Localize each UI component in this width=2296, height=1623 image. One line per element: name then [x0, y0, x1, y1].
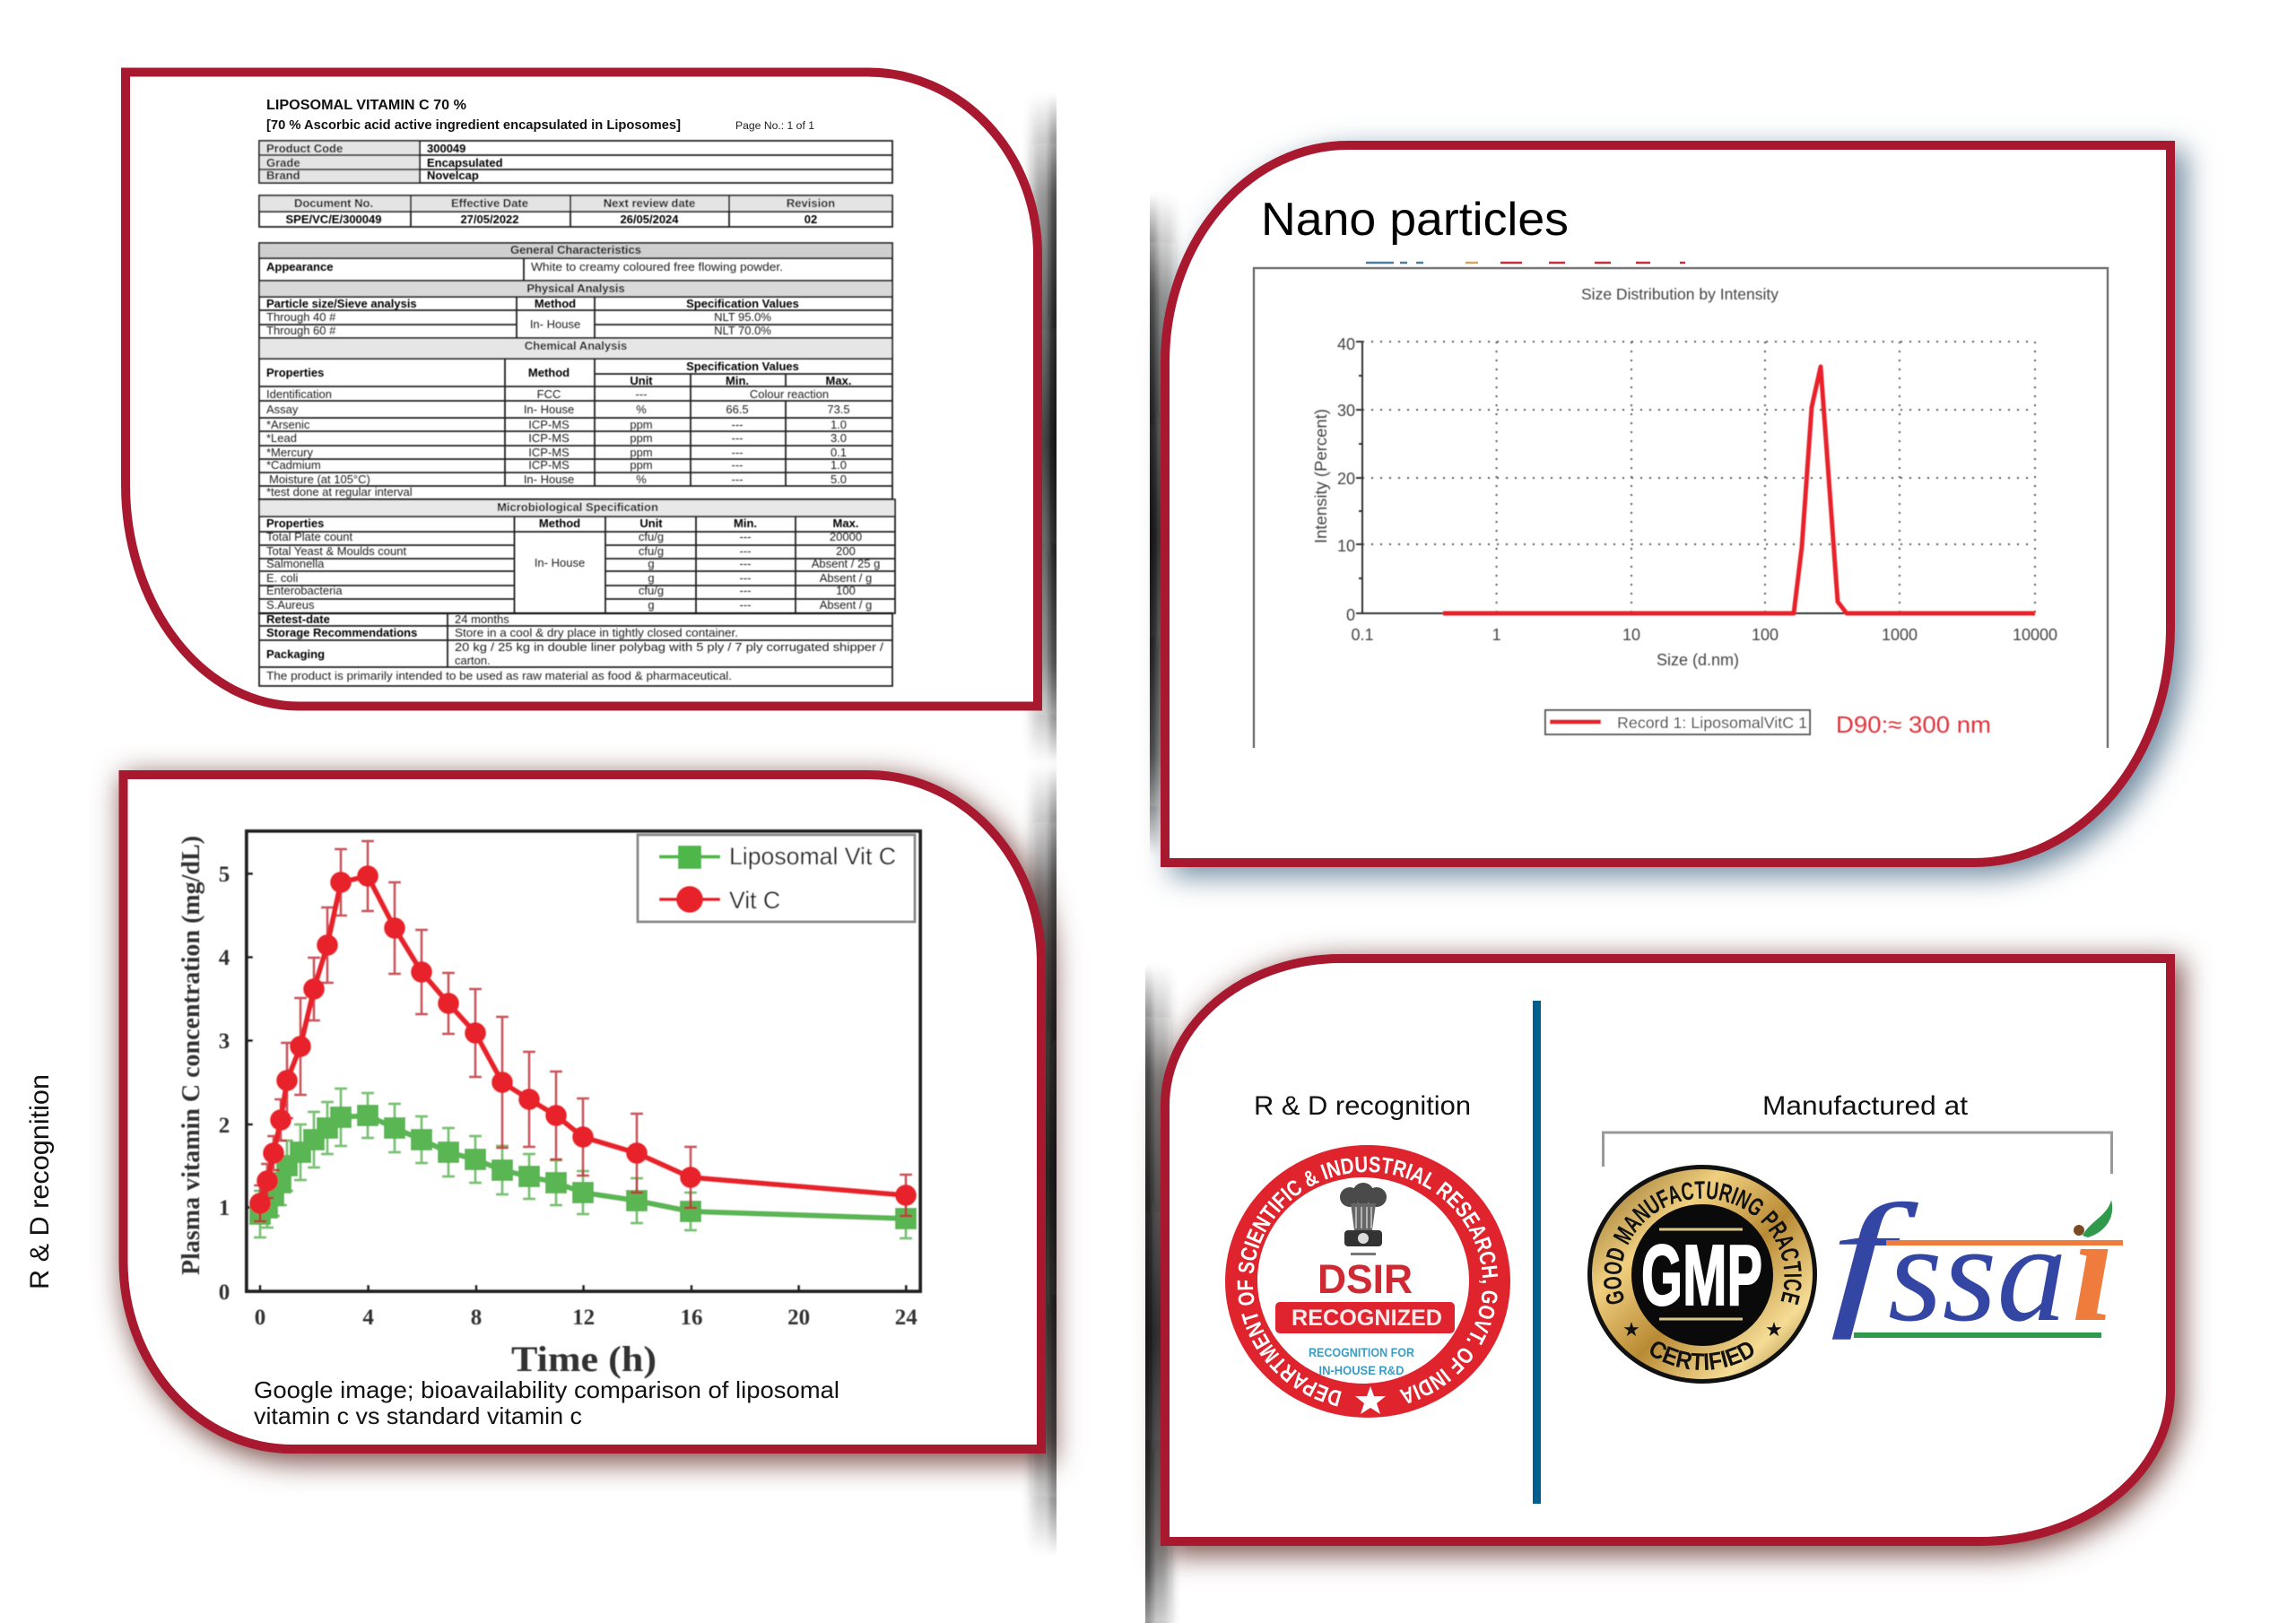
table: characteristics and chemical analysis: Through 60 # [266, 324, 336, 337]
table: product details: Brand [266, 169, 300, 182]
heading: manufactured at: Manufactured at [1762, 1091, 1969, 1121]
table: characteristics and chemical analysis: Min. [726, 374, 749, 387]
y axis tick labels: 4 [219, 946, 230, 970]
table: characteristics and chemical analysis: % [636, 473, 647, 486]
y axis tick labels: 30 [1337, 402, 1355, 420]
table: characteristics and chemical analysis: *Cadmium [266, 458, 321, 472]
x axis tick labels: 4 [362, 1306, 374, 1330]
series: liposomal vitamin C [250, 1089, 916, 1238]
table: characteristics and chemical analysis: Through 40 # [266, 310, 336, 324]
y axis tick labels: 20 [1337, 470, 1355, 488]
table: microbiological specification: cfu/g [639, 530, 664, 543]
table: characteristics and chemical analysis: Chemical Analysis [525, 339, 627, 352]
table: characteristics and chemical analysis: Method [528, 366, 570, 379]
table: microbiological specification: g [648, 571, 655, 585]
chart legend [638, 835, 915, 922]
table: storage and packaging: 20 kg / 25 kg in double liner polybag with 5 ply / 7 ply corrugated shipper / [455, 640, 883, 654]
table: characteristics and chemical analysis: Physical Analysis [526, 282, 625, 295]
table: microbiological specification: 20000 [830, 530, 862, 543]
x axis tick labels [1351, 626, 2057, 644]
table: microbiological specification: Absent / 25 g [812, 557, 880, 570]
table: characteristics and chemical analysis: --- [732, 458, 743, 472]
table: characteristics and chemical analysis: --- [732, 446, 743, 459]
chart caption [254, 1376, 839, 1429]
table: characteristics and chemical analysis: NLT 70.0% [714, 324, 771, 337]
table: characteristics and chemical analysis: Appearance [266, 260, 333, 273]
x axis tick labels: 1 [1492, 626, 1501, 644]
x axis tick labels: 100 [1752, 626, 1779, 644]
table: characteristics and chemical analysis: % [636, 403, 647, 416]
table: characteristics and chemical analysis: 1.0 [831, 458, 847, 472]
table: characteristics and chemical analysis: Particle size/Sieve analysis [266, 297, 417, 310]
y axis title: Intensity (Percent) [1312, 409, 1330, 543]
table: storage and packaging: carton. [455, 654, 491, 667]
table: storage and packaging: 24 months [455, 612, 509, 626]
table: product details [259, 141, 892, 183]
sheet subtitle: [70 % Ascorbic acid active ingredient encapsulated in Liposomes] [266, 118, 681, 133]
x axis tick labels: 20 [787, 1306, 810, 1330]
table: characteristics and chemical analysis: NLT 95.0% [714, 310, 771, 324]
panel: specification sheet [126, 72, 1038, 707]
table: characteristics and chemical analysis: ppm [630, 418, 653, 431]
table: microbiological specification: In- House [535, 556, 585, 569]
table: microbiological specification [259, 499, 895, 613]
icon: national emblem [1340, 1183, 1387, 1255]
table: characteristics and chemical analysis: General Characteristics [510, 243, 641, 256]
x axis tick labels [255, 1306, 918, 1330]
table: microbiological specification: Total Yeast & Moulds count [266, 544, 406, 558]
table: characteristics and chemical analysis [259, 243, 892, 499]
table: characteristics and chemical analysis: ICP-MS [528, 458, 570, 472]
table: characteristics and chemical analysis: ICP-MS [528, 418, 570, 431]
table: microbiological specification: Absent / g [820, 598, 872, 612]
panel: nano particles [1165, 145, 2170, 863]
table: characteristics and chemical analysis: Assay [266, 403, 299, 416]
side label: R & D recognition: R & D recognition [25, 1074, 55, 1289]
table: product details: Encapsulated [427, 156, 503, 169]
icon: fssai logo: ı [2072, 1184, 2115, 1354]
y axis tick labels: 1 [219, 1196, 230, 1220]
table: document control [259, 195, 892, 227]
table: characteristics and chemical analysis: FCC [537, 387, 561, 401]
table: characteristics and chemical analysis: --- [732, 431, 743, 445]
icon: fssai logo: f [1830, 1174, 1919, 1341]
page number: Page No.: 1 of 1 [735, 121, 814, 132]
table: characteristics and chemical analysis: Identification [266, 387, 332, 401]
table: microbiological specification: --- [739, 584, 752, 597]
sheet title: LIPOSOMAL VITAMIN C 70 % [266, 98, 466, 113]
table: characteristics and chemical analysis: Unit [630, 374, 653, 387]
y axis tick labels [1337, 335, 1355, 624]
y axis tick labels: 5 [219, 863, 230, 887]
table: storage and packaging [259, 612, 892, 686]
table: product details: 300049 [427, 142, 465, 155]
table: characteristics and chemical analysis: Specification Values [686, 360, 799, 373]
icon: fssai logo: ssa [1888, 1195, 2066, 1350]
x axis tick labels: 10000 [2013, 626, 2057, 644]
table: characteristics and chemical analysis: 66.5 [726, 403, 749, 416]
table: product details: Grade [266, 156, 300, 169]
table: characteristics and chemical analysis: ppm [630, 446, 653, 459]
table: characteristics and chemical analysis: Specification Values [686, 297, 799, 310]
table: microbiological specification: Total Plate count [266, 530, 353, 543]
table: document control: 27/05/2022 [460, 213, 519, 226]
table: microbiological specification: E. coli [266, 571, 299, 585]
x axis tick labels: 0 [255, 1306, 265, 1330]
table: characteristics and chemical analysis: White to creamy coloured free flowing powder. [531, 260, 783, 273]
table: storage and packaging: Storage Recommendations [266, 626, 417, 639]
icon: GMP certified seal: ★ [1765, 1318, 1783, 1341]
table: microbiological specification: S.Aureus [266, 598, 315, 612]
table: characteristics and chemical analysis: *Lead [266, 431, 297, 445]
icon: GMP certified seal [1587, 1165, 1817, 1384]
table: characteristics and chemical analysis: Max. [826, 374, 851, 387]
y axis tick labels: 0 [219, 1280, 230, 1305]
panel heading: Nano particles [1261, 194, 1569, 246]
table: characteristics and chemical analysis: Moisture (at 105°C) [269, 473, 370, 486]
table: storage and packaging: Retest-date [266, 612, 330, 626]
table: characteristics and chemical analysis: ppm [630, 431, 653, 445]
table: microbiological specification: --- [739, 557, 752, 570]
table: document control: Revision [787, 196, 835, 210]
table: microbiological specification: g [648, 598, 655, 612]
table: storage and packaging: Packaging [266, 647, 325, 661]
chart: size distribution by intensity: Size Distribution by Intensity [1581, 285, 1779, 303]
chart legend: Vit C [729, 887, 780, 914]
icon: DSIR recognized seal: DEPARTMENT OF SCIENTIFIC & INDUSTRIAL RESEARCH, GOVT. OF INDIA [1238, 1157, 1498, 1406]
y axis tick labels [219, 863, 230, 1305]
table: characteristics and chemical analysis: --- [732, 473, 743, 486]
icon: GMP certified seal: ★ [1622, 1318, 1640, 1341]
chart caption: Google image; bioavailability comparison of liposomal [254, 1376, 839, 1403]
table: characteristics and chemical analysis: Properties [266, 366, 324, 379]
table: microbiological specification: g [648, 557, 655, 570]
icon: DSIR recognized seal: RECOGNIZED [1292, 1306, 1442, 1331]
table: microbiological specification: Enterobacteria [266, 584, 343, 597]
table: characteristics and chemical analysis: Method [535, 297, 576, 310]
table: characteristics and chemical analysis: Colour reaction [750, 387, 829, 401]
table: microbiological specification: 100 [836, 584, 856, 597]
table: microbiological specification: Properties [266, 516, 324, 530]
y axis tick labels: 0 [1346, 606, 1355, 624]
table: storage and packaging: The product is primarily intended to be used as raw material as food & pharmaceutical. [266, 669, 732, 682]
x axis title: Size (d.nm) [1657, 651, 1739, 669]
x axis tick labels: 8 [471, 1306, 482, 1330]
table: microbiological specification: Method [539, 516, 580, 530]
table: characteristics and chemical analysis: ppm [630, 458, 653, 472]
table: product details: Novelcap [427, 169, 479, 182]
bracket [1604, 1133, 2111, 1174]
x axis tick labels: 16 [680, 1306, 703, 1330]
table: microbiological specification: Absent / g [820, 571, 872, 585]
icon: GMP certified seal: CERTIFIED [1650, 1341, 1754, 1370]
y axis tick labels: 10 [1337, 537, 1355, 555]
table: document control: 02 [804, 213, 817, 226]
chart legend [1545, 710, 1810, 734]
chart legend: Record 1: LiposomalVitC 1 [1617, 714, 1807, 732]
table: document control: Document No. [294, 196, 373, 210]
chart: size distribution by intensity [1312, 285, 2057, 738]
table: characteristics and chemical analysis: 0.1 [831, 446, 847, 459]
table: characteristics and chemical analysis: In- House [524, 473, 574, 486]
icon: DSIR recognized seal: IN-HOUSE R&D [1318, 1363, 1405, 1377]
table: characteristics and chemical analysis: --- [635, 387, 648, 401]
divider [1533, 1001, 1541, 1504]
table: microbiological specification: --- [739, 530, 752, 543]
chart legend: Liposomal Vit C [729, 843, 896, 870]
x axis title: Time (h) [511, 1339, 657, 1379]
table: document control: Next review date [604, 196, 695, 210]
chart: plasma vitamin C concentration over time [178, 831, 920, 1379]
icon: GMP certified seal: GOOD MANUFACTURING PRACTICE [1604, 1181, 1802, 1306]
icon: GMP certified seal: GMP [1641, 1228, 1762, 1324]
table: characteristics and chemical analysis: *Mercury [266, 446, 314, 459]
table: storage and packaging: Store in a cool & dry place in tightly closed container. [455, 626, 738, 639]
table: microbiological specification: 200 [836, 544, 856, 558]
table: characteristics and chemical analysis: --- [732, 418, 743, 431]
table: characteristics and chemical analysis: In- House [530, 317, 580, 331]
x axis tick labels: 24 [895, 1306, 918, 1330]
table: characteristics and chemical analysis: 5.0 [831, 473, 847, 486]
table: microbiological specification: --- [739, 571, 752, 585]
table: characteristics and chemical analysis: *test done at regular interval [266, 485, 413, 499]
y axis tick labels: 2 [219, 1114, 230, 1138]
x axis tick labels: 1000 [1882, 626, 1918, 644]
panel: certifications [1161, 954, 2175, 1546]
table: microbiological specification: Unit [639, 516, 663, 530]
y axis tick labels: 3 [219, 1029, 230, 1054]
table: characteristics and chemical analysis: ICP-MS [528, 431, 570, 445]
table: characteristics and chemical analysis: *Arsenic [266, 418, 310, 431]
x axis tick labels: 0.1 [1351, 626, 1374, 644]
table: microbiological specification: cfu/g [639, 584, 664, 597]
y axis title: Plasma vitamin C concentration (mg/dL) [178, 836, 205, 1275]
table: document control: 26/05/2024 [620, 213, 679, 226]
y axis tick labels: 40 [1337, 335, 1355, 353]
table: microbiological specification: Min. [734, 516, 757, 530]
table: product details: Product Code [266, 142, 343, 155]
table: microbiological specification: --- [739, 544, 752, 558]
table: characteristics and chemical analysis: In- House [524, 403, 574, 416]
chart caption: vitamin c vs standard vitamin c [254, 1402, 582, 1429]
table: characteristics and chemical analysis: ICP-MS [528, 446, 570, 459]
D90 annotation: D90:≈ 300 nm [1836, 711, 1991, 738]
x axis tick labels: 12 [572, 1306, 595, 1330]
table: document control: Effective Date [451, 196, 528, 210]
table: characteristics and chemical analysis: 1.0 [831, 418, 847, 431]
chart frame [1254, 263, 2108, 748]
table: characteristics and chemical analysis: 73.5 [827, 403, 850, 416]
table: characteristics and chemical analysis: 3.0 [831, 431, 847, 445]
x axis tick labels: 10 [1622, 626, 1640, 644]
table: microbiological specification: Microbiological Specification [497, 500, 658, 514]
table: document control: SPE/VC/E/300049 [286, 213, 381, 226]
series: standard vitamin C [249, 841, 917, 1221]
icon: DSIR recognized seal: RECOGNITION FOR [1309, 1345, 1414, 1359]
table: microbiological specification: --- [739, 598, 752, 612]
icon: DSIR recognized seal: DSIR [1318, 1256, 1413, 1302]
icon: fssai logo [1830, 1174, 2123, 1354]
panel: bioavailability chart [124, 775, 1041, 1449]
table: microbiological specification: Max. [833, 516, 858, 530]
heading: R & D recognition: R & D recognition [1254, 1091, 1471, 1121]
table: microbiological specification: Salmonella [266, 557, 325, 570]
table: microbiological specification: cfu/g [639, 544, 664, 558]
